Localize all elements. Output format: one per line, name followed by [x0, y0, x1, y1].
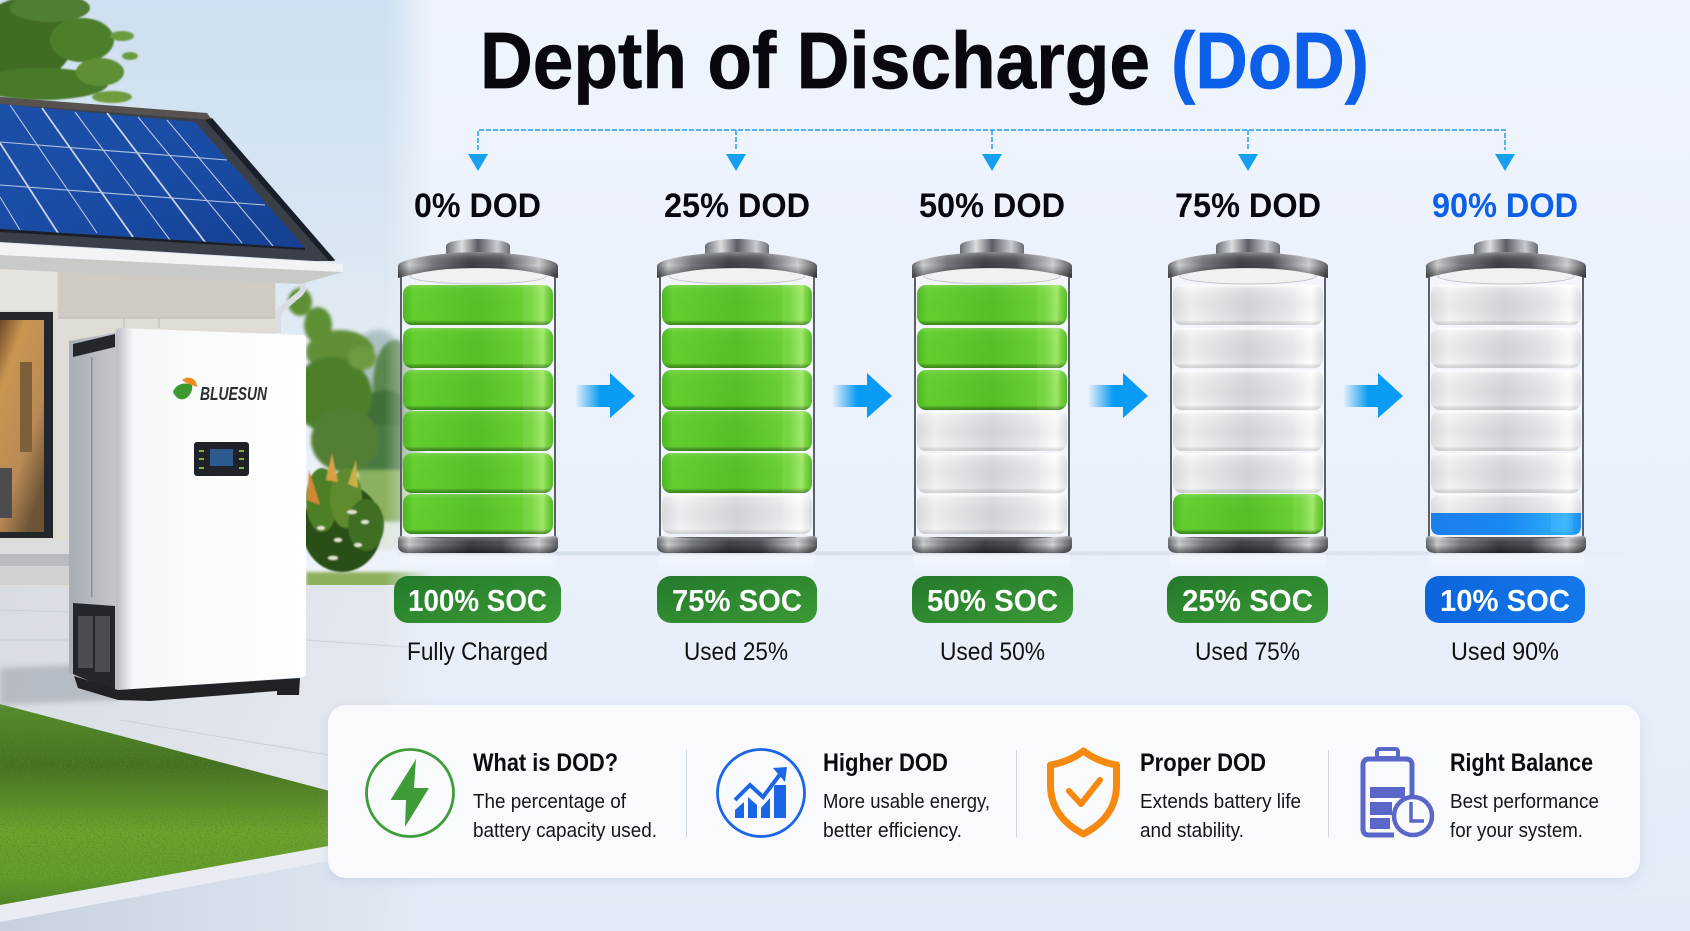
caption: Used 90%: [1451, 638, 1559, 666]
arrow: [1088, 373, 1148, 418]
photo: solar house and home battery: [0, 0, 450, 931]
battery: 75% charged: [657, 239, 817, 576]
description: The percentage of: [473, 790, 626, 813]
fact: Proper DOD: [1050, 749, 1301, 842]
arrow: [832, 373, 892, 418]
column: 25% DOD: [657, 187, 817, 666]
steps: [0, 540, 70, 554]
column: 75% DOD: [1167, 187, 1328, 666]
cabinet shadow: [0, 664, 120, 705]
control display: [194, 442, 249, 476]
roof: [0, 97, 335, 261]
fact: What is DOD: [366, 749, 657, 842]
heading: Higher DOD: [823, 749, 948, 777]
eave: [0, 254, 343, 284]
solar panels: [0, 104, 305, 250]
grass: [0, 704, 345, 908]
badge: 50% SOC: [912, 576, 1073, 623]
caption: Fully Charged: [407, 638, 548, 666]
badge: 100% SOC: [394, 576, 561, 623]
title: Depth of Discharge: [480, 16, 1150, 105]
caption: Used 75%: [1195, 638, 1300, 666]
arrow: [575, 373, 635, 418]
battery: 100% charged: [398, 239, 558, 576]
logo: [173, 378, 268, 400]
description: [823, 790, 990, 842]
battery: 25% charged: [1168, 239, 1328, 576]
description: [473, 790, 657, 842]
badge: 50% SOC: 50% SOC: [927, 583, 1058, 618]
badge: 75% SOC: 75% SOC: [672, 583, 802, 618]
distant trees and field: [288, 288, 446, 588]
description: [1450, 790, 1599, 842]
label: 50% DOD: 50% DOD: [919, 187, 1065, 225]
top-left tree: [0, 0, 138, 103]
description: [1140, 790, 1301, 842]
label: 25% DOD: 25% DOD: [664, 187, 810, 225]
heading: Right Balance: [1450, 749, 1593, 777]
label: 0% DOD: 0% DOD: [414, 187, 541, 225]
battery cabinet: [69, 328, 306, 701]
downpipe: [278, 272, 303, 333]
icon: rising chart: [718, 750, 804, 836]
patio: [0, 585, 398, 790]
badge: 10% SOC: 10% SOC: [1440, 583, 1570, 618]
description: and stability.: [1140, 819, 1244, 842]
column: 90% DOD: [1425, 187, 1586, 666]
battery: 10% charged: [1426, 239, 1586, 576]
icon: lightning bolt: [366, 750, 454, 836]
window: [0, 312, 53, 538]
path strip: [0, 862, 368, 931]
heading: Proper DOD: [1140, 749, 1266, 777]
badge: 75% SOC: [657, 576, 817, 623]
house wall: [0, 262, 276, 587]
label: 90% DOD: 90% DOD: [1432, 187, 1578, 225]
sky: [0, 0, 420, 344]
badge: 100% SOC: 100% SOC: [408, 583, 547, 618]
ground shadow line: [400, 552, 1640, 555]
column: 0% DOD: [394, 187, 561, 666]
icon: battery with clock: [1363, 749, 1432, 835]
column: 50% DOD: [912, 187, 1073, 666]
dashed connector with drop arrows: [468, 130, 1515, 171]
badge: 25% SOC: [1167, 576, 1328, 623]
bush: [302, 453, 384, 572]
logo: BLUESUN: [200, 384, 268, 404]
badge: 10% SOC: [1425, 576, 1585, 623]
badge: 25% SOC: 25% SOC: [1182, 583, 1313, 618]
fact: Higher DOD: [718, 749, 990, 842]
label: 75% DOD: 75% DOD: [1175, 187, 1321, 225]
panel: key facts: [328, 705, 1640, 878]
description: Extends battery life: [1140, 790, 1301, 813]
description: battery capacity used.: [473, 819, 657, 842]
fact: Right Balance: [1363, 749, 1599, 842]
description: Best performance: [1450, 790, 1599, 813]
icon: shield with check: [1050, 751, 1116, 834]
title: (DoD): [1171, 16, 1369, 105]
arrow: [1343, 373, 1403, 418]
description: better efficiency.: [823, 819, 962, 842]
caption: Used 25%: [684, 638, 788, 666]
battery: 50% charged: [912, 239, 1072, 576]
heading: What is DOD?: [473, 749, 618, 777]
description: for your system.: [1450, 819, 1583, 842]
description: More usable energy,: [823, 790, 990, 813]
caption: Used 50%: [940, 638, 1045, 666]
